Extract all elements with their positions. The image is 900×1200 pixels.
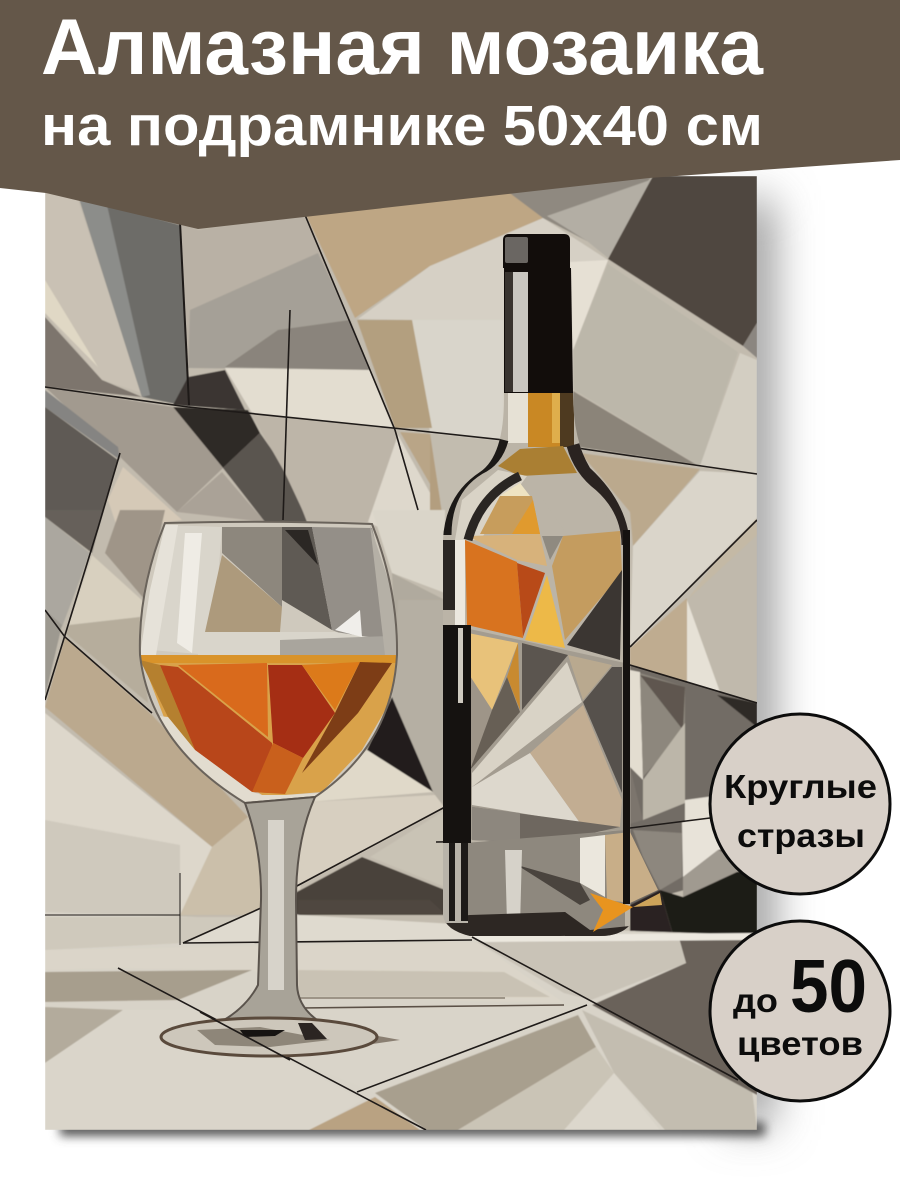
bottle base reflection bbox=[590, 530, 662, 932]
title: Алмазная мозаика bbox=[41, 2, 764, 91]
painting: cubist wine still life bbox=[45, 176, 757, 1130]
bottle neck bbox=[504, 268, 573, 393]
glass stem bbox=[224, 796, 317, 1018]
bottle body bbox=[443, 393, 630, 936]
painting lines bbox=[45, 215, 757, 1130]
badge: round rhinestones: стразы bbox=[737, 817, 865, 854]
title bbox=[41, 2, 764, 158]
badge: round rhinestones bbox=[710, 714, 890, 894]
wine bbox=[140, 655, 397, 795]
badge: round rhinestones: Круглые bbox=[724, 768, 877, 805]
badge: up to 50 colours: до bbox=[733, 982, 778, 1019]
badge: up to 50 colours: 50 bbox=[790, 944, 867, 1028]
bottle cap bbox=[503, 234, 570, 268]
badge: up to 50 colours: цветов bbox=[737, 1025, 863, 1062]
wine bottle bbox=[440, 234, 662, 940]
glass bowl bbox=[140, 522, 397, 803]
title: на подрамнике 50х40 см bbox=[41, 94, 763, 158]
header banner bbox=[0, 0, 900, 229]
wine glass bbox=[140, 522, 400, 1056]
line over glass foot bbox=[200, 1012, 290, 1060]
painting background facets bbox=[45, 176, 757, 1130]
glass foot bbox=[161, 1018, 400, 1056]
badge: up to 50 colours bbox=[710, 921, 890, 1101]
canvas shadow bbox=[60, 200, 772, 1136]
table facets bbox=[45, 912, 757, 1130]
